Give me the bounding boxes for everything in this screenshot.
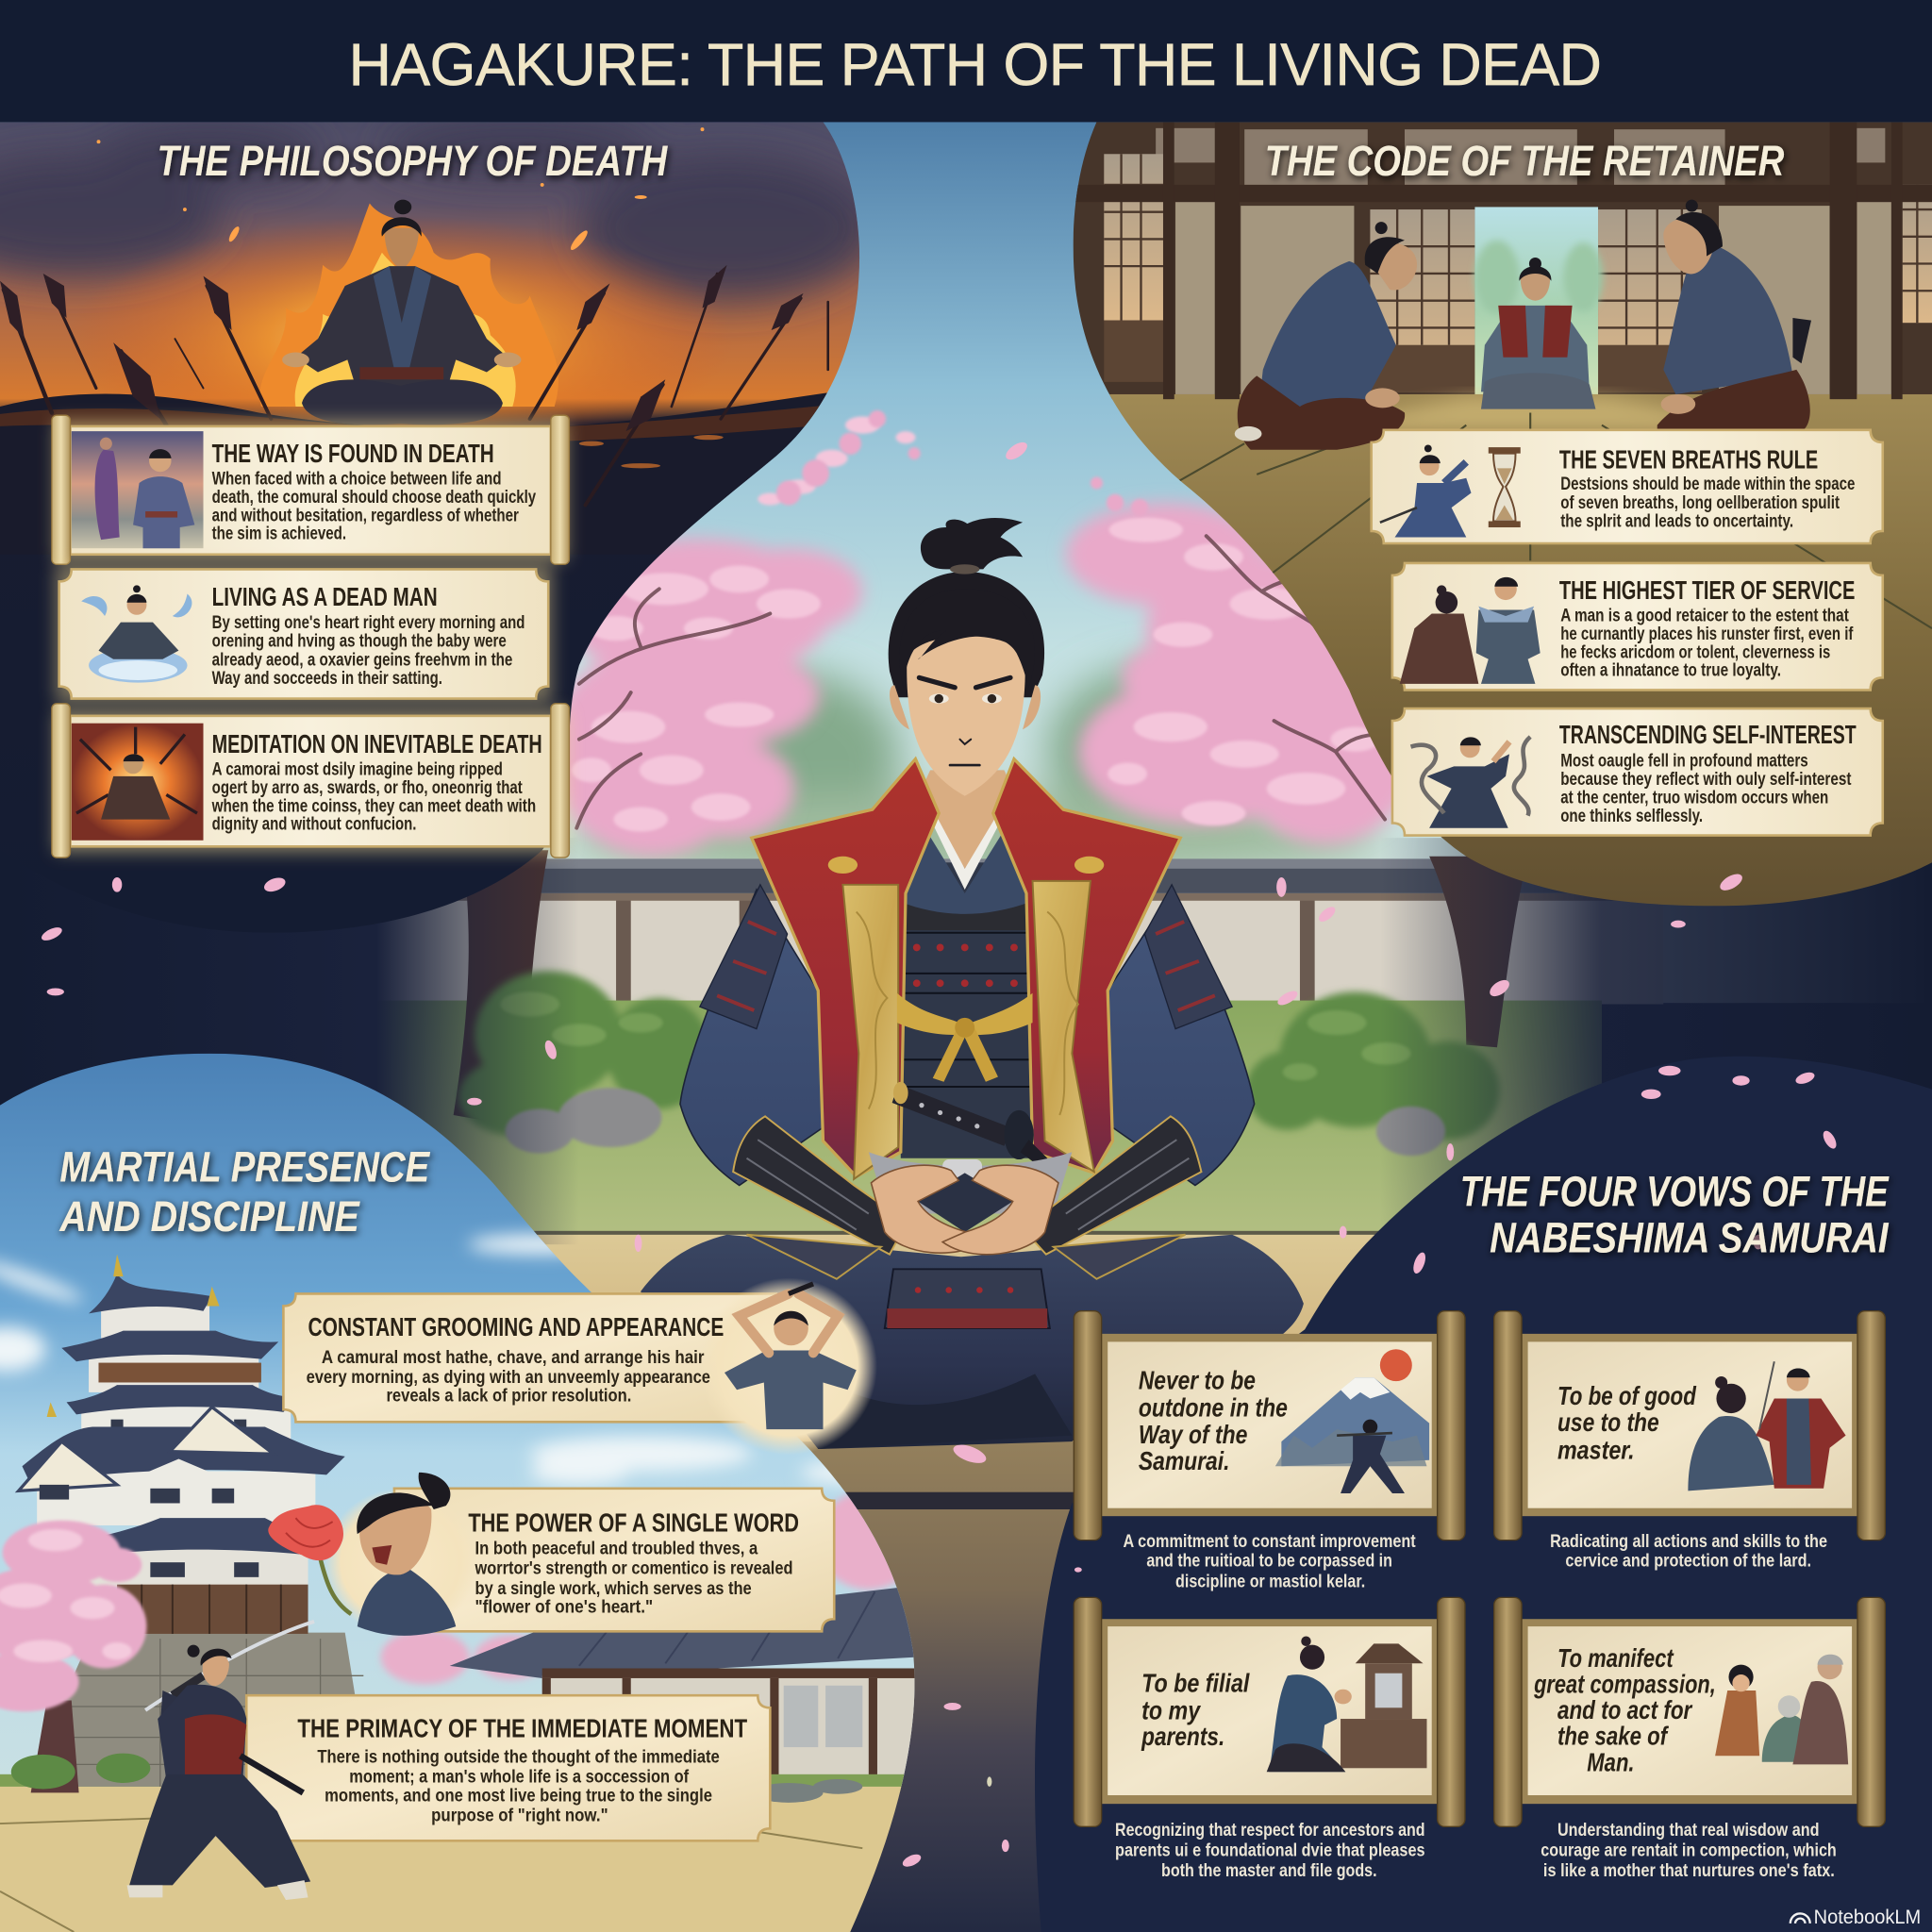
illustration: retainer serving master: [1688, 1361, 1846, 1491]
plaque: living as a dead man: By setting one's heart right every morning and: [212, 613, 525, 633]
caption: to be filial: [1115, 1820, 1425, 1881]
plaque: the power of a single word: THE POWER OF A SINGLE WORD: [468, 1508, 799, 1538]
scroll: to be of good use: To be of good: [1557, 1381, 1697, 1410]
illustration: samurai and hourglass: [1380, 445, 1521, 537]
plaque: the seven breaths rule: of seven breaths, long oellberation spulit: [1560, 493, 1840, 513]
scroll: meditation on inevitable death: A camorai most dsily imagine being ripped: [212, 760, 503, 780]
dark vignette left and right of the garden: [0, 838, 1932, 1356]
central samurai: [641, 518, 1304, 1449]
scroll: never to be outdone: Never to be: [1139, 1366, 1256, 1395]
scroll: the way is found in death: and without besitation, regardless of whether: [212, 506, 519, 525]
plaque: living as a dead man: orening and hving as though the baby were: [212, 632, 507, 652]
plaque: constant grooming and appearance: [283, 1277, 877, 1456]
plaque: constant grooming and appearance: A camural most hathe, chave, and arrange his hair: [322, 1348, 705, 1368]
plaque: the power of a single word: In both peaceful and troubled thves, a: [475, 1540, 758, 1559]
heading: the philosophy of death: THE PHILOSOPHY OF DEATH: [158, 137, 668, 185]
scroll: the way is found in death: the sim is achieved.: [212, 524, 346, 543]
illustration: family in compassion: [1715, 1655, 1848, 1764]
scroll: never to be outdone: Samurai.: [1139, 1446, 1230, 1475]
falling petals: [40, 439, 1839, 1869]
plaque: transcending self-interest: one thinks selflessly.: [1560, 807, 1703, 826]
plaque: the power of a single word: "flower of one's heart.": [475, 1598, 653, 1618]
plaque: transcending self-interest: [1392, 708, 1883, 836]
plaque: the primacy of the immediate moment: moments, and one most live being true to the single: [325, 1787, 712, 1807]
shoulder armor: [700, 885, 788, 1029]
plaque: transcending self-interest: because they reflect with ouly self-interest: [1560, 770, 1852, 790]
plaque: the primacy of the immediate moment: There is nothing outside the thought of the immediate: [317, 1747, 720, 1767]
illustration: praying at family shrine: [1267, 1637, 1426, 1772]
figure: seated lord in doorway: [1481, 258, 1595, 409]
plaque: the primacy of the immediate moment: THE PRIMACY OF THE IMMEDIATE MOMENT: [297, 1714, 747, 1743]
scroll: to be filial: to my: [1141, 1696, 1202, 1725]
illustration: retainer before lord: [1400, 577, 1541, 684]
caption: to be of good use: [1550, 1531, 1827, 1572]
figure: samurai swordsman: [127, 1622, 314, 1900]
illustration: floating meditator: [81, 585, 192, 683]
scroll: meditation on inevitable death: [52, 704, 569, 858]
scroll: never to be outdone: outdone in the: [1139, 1392, 1288, 1422]
illustration: meditating samurai in flames: [282, 200, 521, 425]
plaque: the highest tier of service: he fecks aricdom or tolent, cleverness is: [1560, 642, 1830, 662]
caption: to manifest compassion: Understanding that real wisdow and: [1557, 1820, 1819, 1840]
caption: to be filial: Recognizing that respect for ancestors and: [1115, 1820, 1425, 1840]
heading: the code of the retainer: THE CODE OF THE RETAINER: [1265, 137, 1784, 185]
head: [889, 572, 1044, 697]
scroll: to be of good use: use to the: [1557, 1407, 1659, 1437]
scroll: to be filial: To be filial: [1141, 1668, 1251, 1697]
illustration: two men at dusk: [72, 431, 204, 548]
scroll: never to be outdone: Way of the: [1139, 1420, 1247, 1449]
plaque: the seven breaths rule: [1372, 430, 1883, 543]
plaque: living as a dead man: Way and socceeds in their satting.: [212, 669, 442, 689]
scroll: meditation on inevitable death: dignity and without confucion.: [212, 815, 416, 835]
heading: martial presence and discipline: [58, 1143, 430, 1241]
plaque: the seven breaths rule: Destsions should be made within the space: [1560, 475, 1855, 494]
plaque: transcending self-interest: at the center, truo wisdom occurs when: [1560, 789, 1828, 808]
scroll: to be filial: parents.: [1141, 1722, 1224, 1751]
plaque: the highest tier of service: often a ihnatance to true loyalty.: [1560, 660, 1781, 680]
heading: the four vows of the nabeshima samurai: [1460, 1168, 1890, 1262]
panel: martial presence background: [0, 1047, 937, 1932]
caption: to be of good use: cervice and protection of the lard.: [1565, 1551, 1811, 1572]
scroll: meditation on inevitable death: MEDITATION ON INEVITABLE DEATH: [212, 729, 542, 758]
scroll: to manifest compassion: Man.: [1587, 1748, 1635, 1777]
plaque: transcending self-interest: Most oaugle fell in profound matters: [1560, 751, 1808, 771]
caption: to be filial: parents ui e foundational dvie that pleases: [1115, 1840, 1425, 1861]
scroll: the way is found in death: death, the comural should choose death quickly: [212, 488, 537, 508]
plaque: the power of a single word: by a single work, which serves as the: [475, 1579, 752, 1599]
heading: martial presence and discipline: MARTIAL PRESENCE: [59, 1143, 430, 1191]
plaque: the primacy of the immediate moment: moment; a man's whole life is a soccession of: [349, 1767, 690, 1787]
caption: to manifest compassion: courage are rentait in compection, which: [1541, 1840, 1837, 1861]
caption: never to be outdone: discipline or mastiol kelar.: [1175, 1571, 1365, 1591]
title: HAGAKURE: THE PATH OF THE LIVING DEAD: [349, 32, 1602, 98]
scroll: to manifest compassion: To manifect: [1557, 1643, 1674, 1673]
plaque: the power of a single word: worrtor's strength or comentico is revealed: [475, 1559, 792, 1579]
title bar: [0, 0, 1932, 122]
panel: philosophy of death background: [0, 121, 887, 935]
hands: [918, 1173, 1013, 1232]
caption: never to be outdone: and the ruitioal to be corpassed in: [1146, 1551, 1392, 1572]
illustration: samurai in explosion: [72, 724, 204, 841]
plaque: living as a dead man: already aeod, a oxavier geins freehvm in the: [212, 650, 512, 670]
scroll: to manifest compassion: great compassion,: [1533, 1670, 1716, 1699]
chest armor: [901, 862, 1033, 1158]
figure: kneeling retainer left: [1235, 222, 1417, 450]
plaque: living as a dead man: LIVING AS A DEAD MAN: [212, 582, 438, 611]
caption: to be filial: both the master and file gods.: [1161, 1860, 1377, 1881]
katana: [892, 1082, 1054, 1171]
caption: never to be outdone: A commitment to constant improvement: [1124, 1531, 1416, 1552]
castle tiers: [19, 1255, 345, 1634]
figure: kneeling retainer right: [1657, 200, 1811, 431]
plaque: the primacy of the immediate moment: [246, 1695, 770, 1840]
NotebookLM watermark: NotebookLM: [1814, 1907, 1921, 1928]
gold sash: [897, 993, 1033, 1035]
red vest: [752, 759, 939, 1176]
plaque: living as a dead man: [56, 564, 552, 702]
caption: to be of good use: Radicating all actions and skills to the: [1550, 1531, 1827, 1552]
scroll: the way is found in death: THE WAY IS FOUND IN DEATH: [212, 439, 494, 468]
plaque: constant grooming and appearance: reveals a lack of prior resolution.: [386, 1387, 631, 1407]
scroll: to be of good use: [1494, 1311, 1885, 1541]
scroll: to manifest compassion: the sake of: [1557, 1721, 1670, 1750]
scroll: never to be outdone: [1074, 1311, 1465, 1541]
tassets: [747, 1235, 881, 1279]
stone base: [25, 1633, 370, 1787]
scroll: meditation on inevitable death: when the time coinss, they can meet death with: [211, 797, 536, 817]
panel: code of the retainer background: [1059, 122, 1932, 924]
forearm guards: [733, 1116, 907, 1255]
illustration: samurai before mount fuji: [1275, 1349, 1429, 1493]
scroll: the way is found in death: [52, 415, 569, 564]
illustration: man tying hair: [700, 1277, 877, 1456]
plaque: constant grooming and appearance: every morning, as dying with an unveemly appearance: [307, 1368, 710, 1388]
panel: four vows background: [1010, 1047, 1932, 1932]
plaque: the seven breaths rule: the splrit and leads to oncertainty.: [1560, 511, 1793, 531]
plaque: the highest tier of service: [1392, 563, 1883, 690]
collar and neck: [901, 789, 1030, 914]
scroll: the way is found in death: When faced with a choice between life and: [212, 469, 502, 489]
illustration: shouting samurai with flower: [268, 1473, 476, 1637]
caption: to manifest compassion: [1541, 1820, 1837, 1881]
scroll: meditation on inevitable death: ogert by arro as, swards, or fho, oneonrig that: [212, 778, 523, 798]
grey obi: [869, 1152, 1072, 1214]
scroll: to be of good use: master.: [1557, 1435, 1635, 1464]
scroll: to manifest compassion: and to act for: [1557, 1695, 1692, 1724]
plaque: constant grooming and appearance: CONSTANT GROOMING AND APPEARANCE: [308, 1312, 724, 1341]
plaque: the highest tier of service: A man is a good retaicer to the estent that: [1560, 606, 1849, 625]
plaque: the power of a single word: [268, 1473, 834, 1637]
scroll: to manifest compassion: [1494, 1597, 1885, 1826]
legs: [641, 1235, 1304, 1449]
caption: never to be outdone: [1124, 1531, 1416, 1591]
illustration: samurai with serpents: [1411, 737, 1530, 828]
plaque: the primacy of the immediate moment: purpose of "right now.": [431, 1806, 608, 1825]
heading: martial presence and discipline: AND DISCIPLINE: [58, 1192, 360, 1241]
sleeves: [680, 890, 823, 1185]
caption: to manifest compassion: is like a mother that nurtures one's fatx.: [1543, 1860, 1835, 1881]
plaque: the seven breaths rule: THE SEVEN BREATHS RULE: [1559, 444, 1818, 474]
scroll: to be filial: [1074, 1597, 1465, 1826]
plaque: the highest tier of service: he curnantly places his runster first, even if: [1560, 625, 1854, 644]
